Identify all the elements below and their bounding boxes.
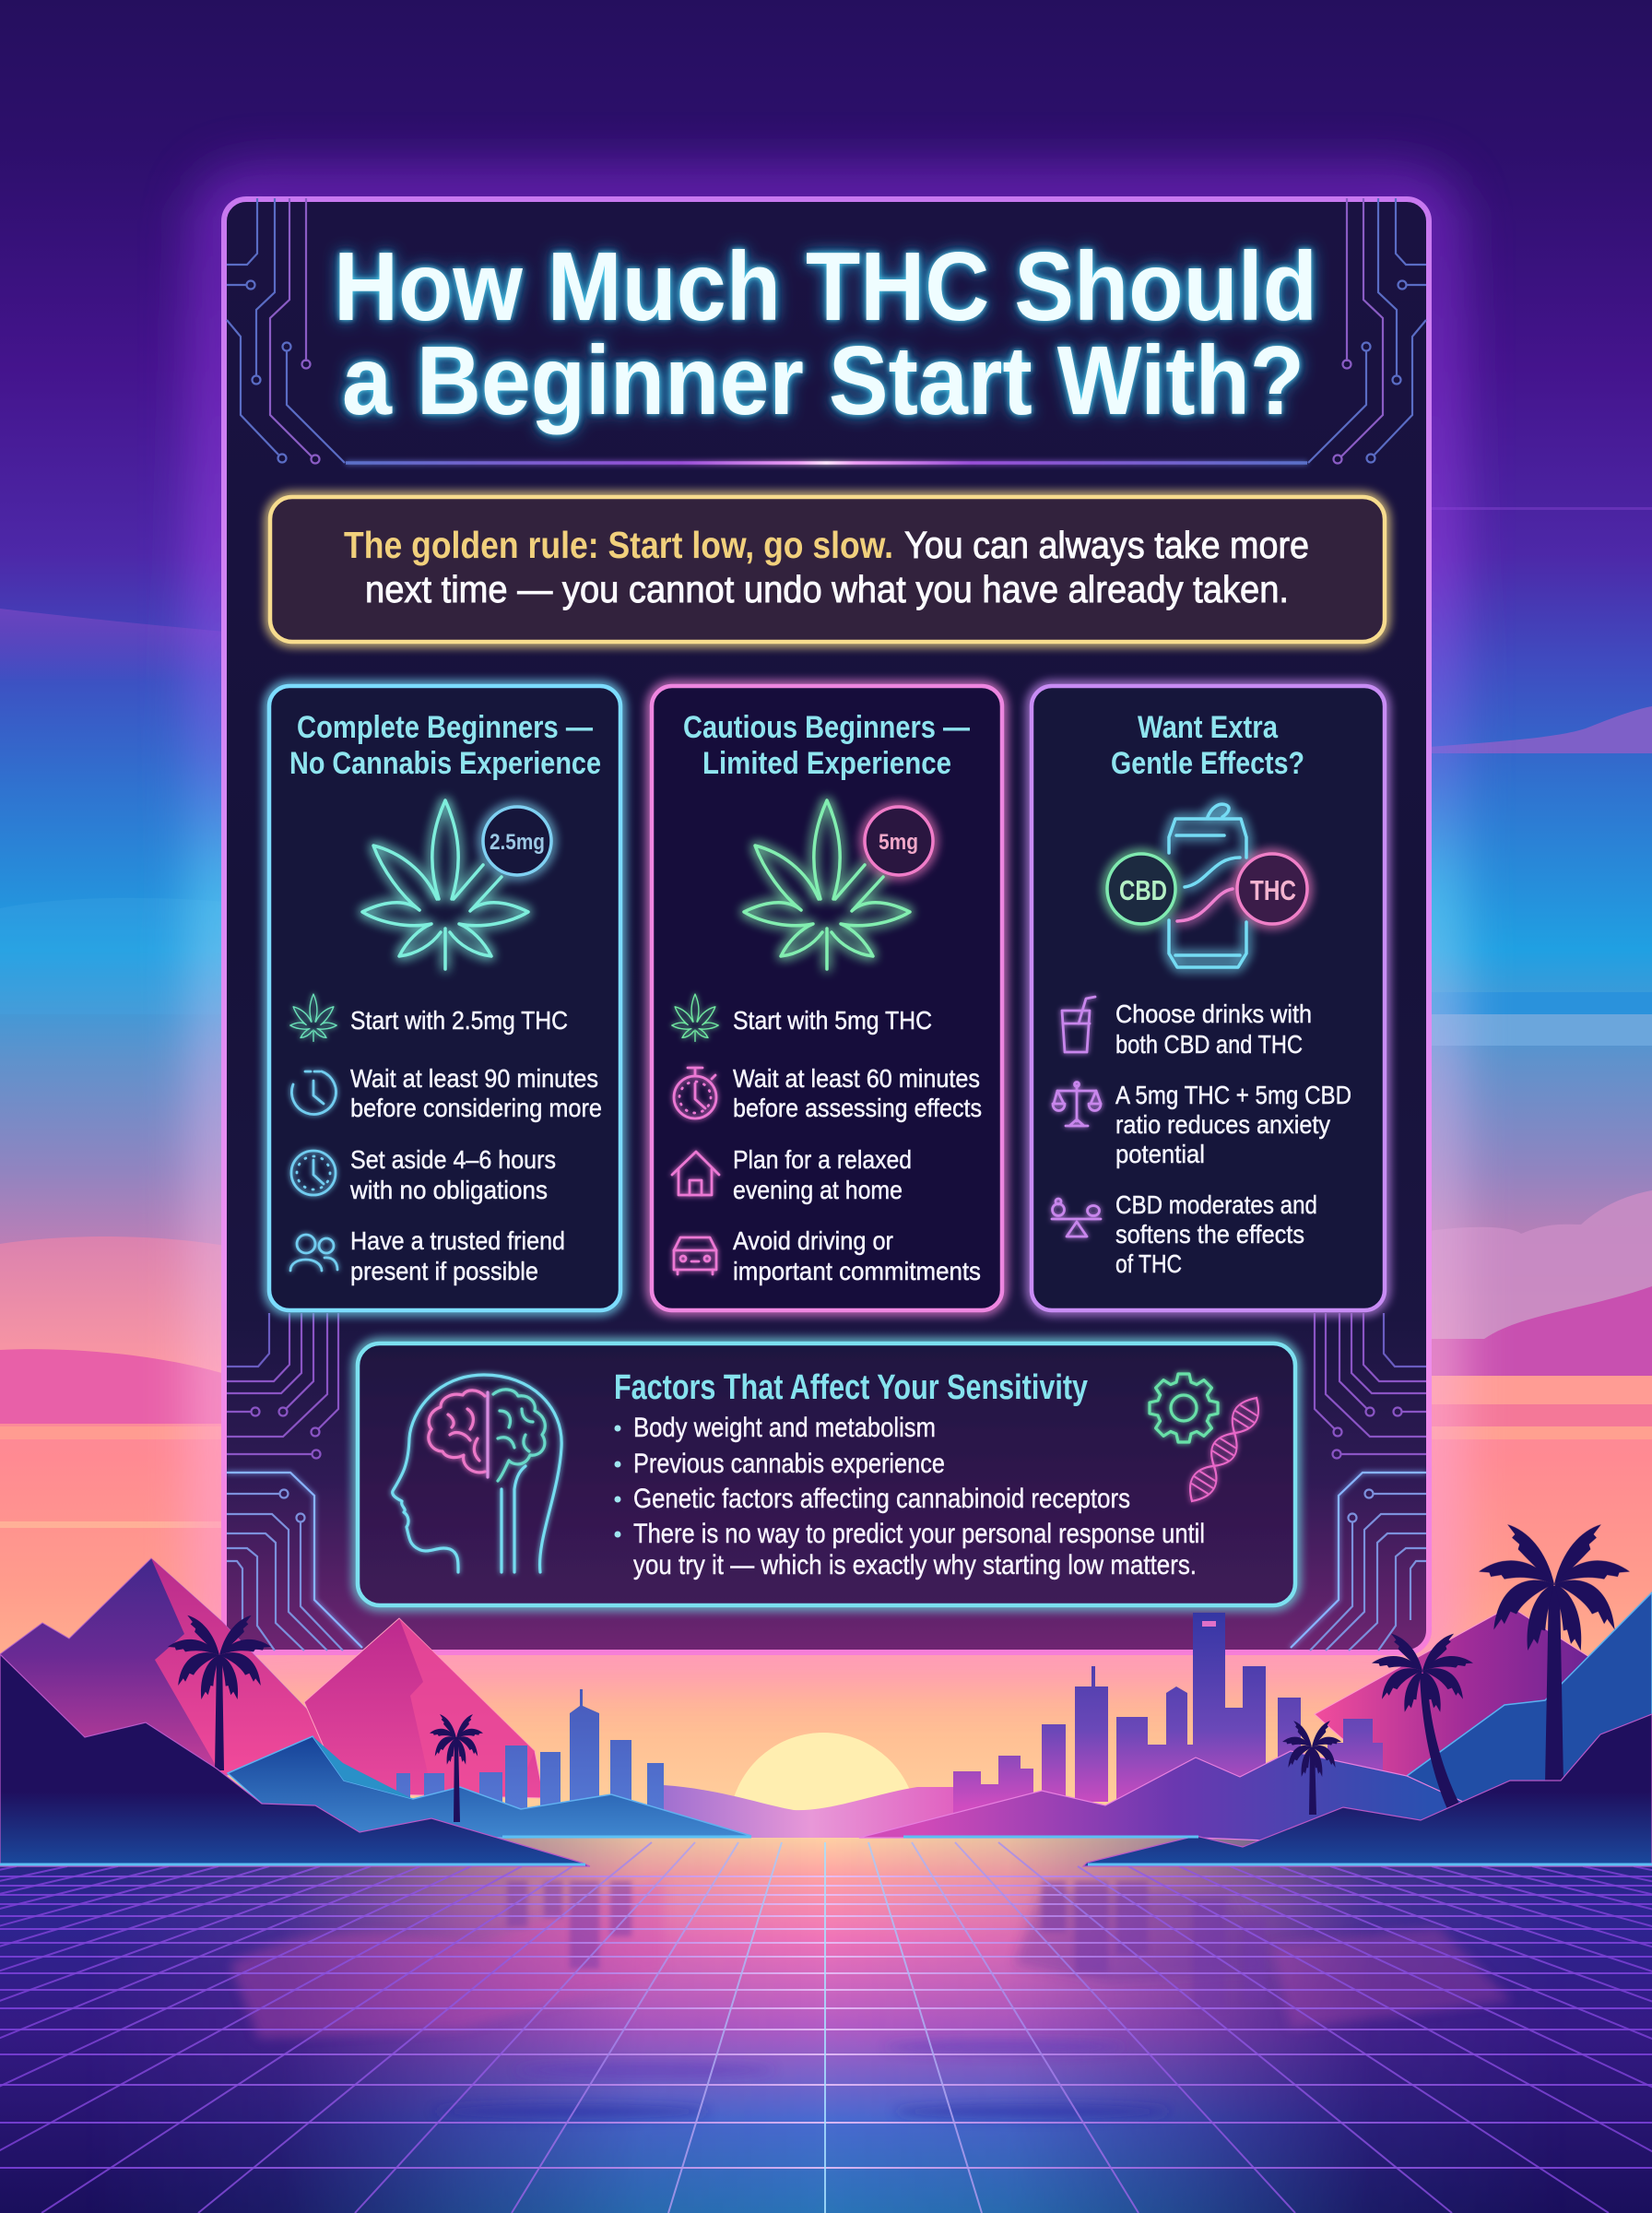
icon: drink can with CBD and THC: THC [1250,874,1296,906]
bullet list [614,1413,1205,1580]
row: choose drinks [1062,997,1312,1059]
title [334,232,1317,435]
icon: gear [1150,1374,1218,1442]
title divider [346,461,1307,465]
row: avoid driving [674,1226,981,1285]
row: wait 90 minutes: before considering more [350,1094,602,1122]
heading: extra gentle [1111,710,1304,781]
row: CBD moderates [1052,1190,1317,1278]
row: set aside hours: Set aside 4–6 hours [350,1145,556,1174]
row: 5mg ratio [1053,1081,1351,1168]
bullet list: Genetic factors affecting cannabinoid receptors [633,1484,1130,1514]
row: wait 90 minutes [291,1064,602,1122]
callout: golden rule: You can always take more [904,524,1309,566]
tower window [1202,1621,1216,1627]
pale hill behind sun [645,1785,1014,1838]
row: start with 5mg: Start with 5mg THC [733,1006,932,1035]
panel: extra gentle effects [1032,686,1385,1310]
row: avoid driving: important commitments [733,1257,981,1285]
row: set aside hours [291,1145,556,1204]
row: wait 60 minutes: before assessing effects [733,1094,982,1122]
main panel [224,199,1429,1652]
row: 5mg ratio: A 5mg THC + 5mg CBD [1115,1081,1351,1109]
bullet list: Previous cannabis experience [633,1449,945,1479]
palm tree right large [1479,1524,1630,1784]
callout: golden rule: The golden rule: Start low, go slow. [344,524,893,566]
circuit traces bottom right [1291,1313,1426,1651]
horizon lines [0,1837,1652,1864]
clouds right [1429,507,1652,1439]
foreground dark land right [1083,1714,1652,1866]
row: choose drinks: Choose drinks with [1115,1000,1312,1028]
city reflections [507,1881,1266,2010]
heading: complete beginners: Complete Beginners — [297,710,593,745]
row: trusted friend: Have a trusted friend [350,1226,565,1255]
clouds left [0,609,553,1528]
bullet list: There is no way to predict your personal response until [633,1519,1205,1549]
city skyline left [396,1689,664,1812]
title: How Much THC Should [334,232,1317,341]
row: wait 90 minutes: Wait at least 90 minutes [350,1064,598,1093]
icon: cannabis leaf with 2.5mg badge [362,800,551,969]
reflections [230,1881,1512,2119]
heading: cautious beginners: Cautious Beginners — [683,710,970,745]
heading: complete beginners: No Cannabis Experience [289,746,601,781]
palm tree right medium [1372,1634,1473,1809]
heading: factors: Factors That Affect Your Sensitivity [614,1368,1088,1407]
row: choose drinks: both CBD and THC [1115,1030,1303,1059]
row: CBD moderates: of THC [1115,1249,1182,1278]
row: wait 60 minutes: Wait at least 60 minutes [733,1064,980,1093]
icon: head and brain [393,1375,561,1572]
circuit traces top left [227,198,345,463]
panel glow [221,196,1432,1654]
heading: cautious beginners: Limited Experience [702,746,951,781]
row: relaxed evening at home: Plan for a relaxed [733,1145,912,1174]
circuit traces bottom left [227,1313,362,1651]
row: relaxed evening at home [672,1145,912,1204]
row: start with 5mg [672,994,932,1041]
row: wait 60 minutes [674,1064,982,1122]
row: CBD moderates: softens the effects [1115,1220,1304,1249]
row: relaxed evening at home: evening at home [733,1176,903,1204]
title: a Beginner Start With? [342,326,1304,435]
heading: cautious beginners [683,710,970,781]
heading: complete beginners [289,710,601,781]
row: start with 2.5mg: Start with 2.5mg THC [350,1006,568,1035]
row: trusted friend: present if possible [350,1257,538,1285]
right mountain [1315,1606,1595,1807]
dose label 2.5mg: 2.5mg [490,830,545,855]
row: CBD moderates: CBD moderates and [1115,1190,1317,1219]
row: 5mg ratio: potential [1115,1140,1205,1168]
water and grid ground [0,1837,1652,2213]
mountains left [0,1558,544,1798]
foreground dark land left [0,1654,590,1866]
blue and purple hills right [859,1592,1652,1844]
blue hills left [228,1736,751,1838]
icon: drink can with CBD and THC: CBD [1119,874,1167,906]
dose label 5mg: 5mg [879,830,918,855]
row: set aside hours: with no obligations [349,1176,548,1204]
panel: cautious beginners [652,686,1002,1310]
city skyline right [953,1613,1383,1813]
icon: drink can with CBD and THC [1107,804,1307,967]
row: avoid driving: Avoid driving or [733,1226,893,1255]
heading: extra gentle: Want Extra [1138,710,1279,745]
row: trusted friend [290,1226,565,1285]
bullet list: Body weight and metabolism [633,1413,936,1443]
grid perspective lines [0,1842,1652,2213]
panel: factors that affect sensitivity [358,1343,1295,1605]
panel: complete beginners [269,686,620,1310]
row: start with 2.5mg [290,994,568,1041]
grid horizontal lines [0,1876,1652,2168]
palm tree left large [168,1615,271,1770]
sun [729,1733,917,1921]
circuit traces top right [1308,198,1426,463]
icon: DNA helix [1182,1391,1267,1508]
callout: golden rule: next time — you cannot undo what you have already taken. [365,568,1289,610]
palm tree left small [430,1714,483,1822]
callout: golden rule [270,497,1385,642]
row: 5mg ratio: ratio reduces anxiety [1115,1110,1330,1139]
palm tree right small [1282,1721,1341,1815]
heading: extra gentle: Gentle Effects? [1111,746,1304,781]
bullet list: you try it — which is exactly why starting low matters. [633,1550,1197,1580]
icon: cannabis leaf with 5mg badge [744,800,933,969]
